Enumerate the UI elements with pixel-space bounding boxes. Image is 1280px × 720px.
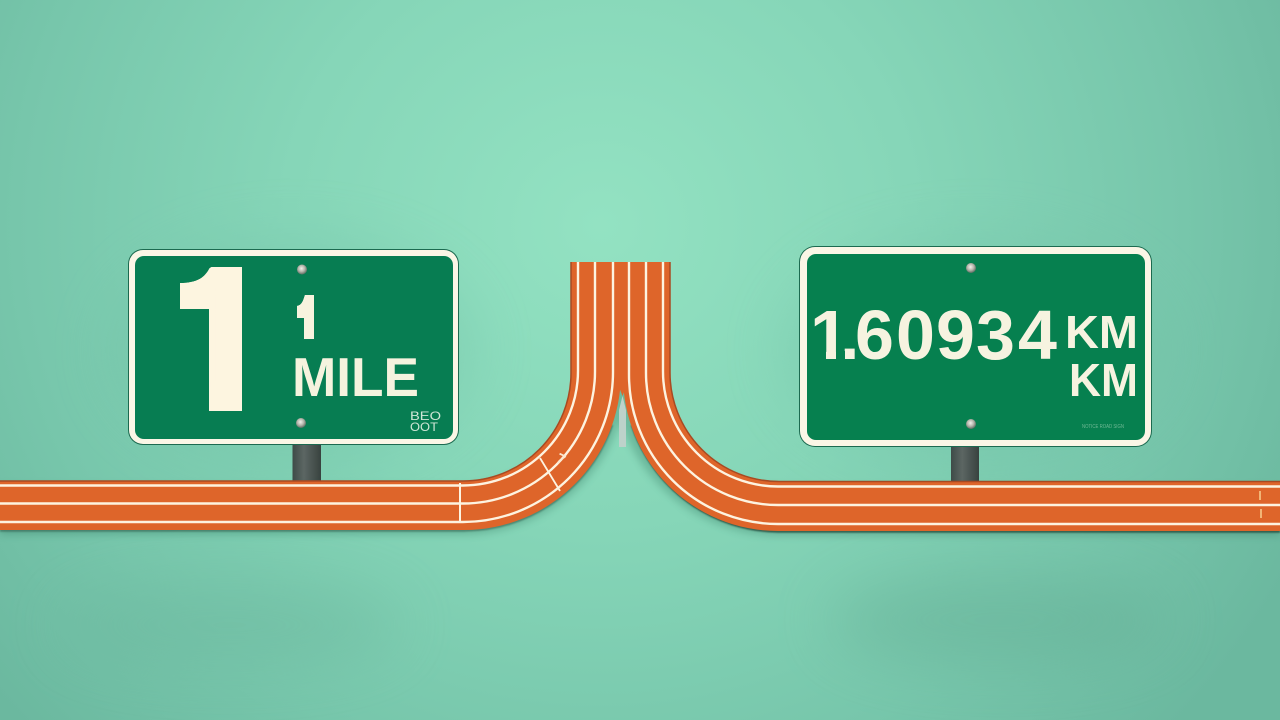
right lane surface xyxy=(623,262,1280,531)
dark edge: left track xyxy=(0,425,612,530)
fine print: OOT xyxy=(410,420,439,434)
value: 1.60934: 1.60934 xyxy=(810,296,1057,374)
lane marker xyxy=(540,458,560,491)
running track xyxy=(0,262,1280,532)
label: mile: MILE xyxy=(292,346,419,408)
rivet: bottom xyxy=(966,419,976,429)
left lane surface xyxy=(0,262,621,530)
start line xyxy=(459,483,461,522)
fine print: BEO xyxy=(410,409,441,423)
big numeral 1 xyxy=(180,267,242,411)
fine print: NOTICE ROAD SIGN xyxy=(1082,424,1124,430)
darker upper edges xyxy=(0,262,1280,482)
sign: kilometres xyxy=(799,246,1152,447)
small numeral 1 xyxy=(297,295,314,339)
small numeral 1: 1 xyxy=(290,281,326,353)
merged centre xyxy=(616,262,628,396)
post: right sign xyxy=(951,445,979,483)
rivet: top xyxy=(966,263,976,273)
track shadow xyxy=(0,274,1280,511)
rivet: bottom xyxy=(296,418,306,428)
unit: km: KM xyxy=(1065,306,1138,358)
sign: 1 mile xyxy=(128,249,459,445)
post: left sign xyxy=(292,444,321,482)
lane number: 7 xyxy=(553,450,568,469)
rivet: top xyxy=(297,264,307,274)
finish ticks xyxy=(1260,491,1261,518)
right lane lines xyxy=(629,262,1280,524)
left lane lines xyxy=(0,262,613,522)
big numeral 1: 1 xyxy=(164,224,280,456)
fine print xyxy=(410,409,441,434)
unit: km repeat: KM xyxy=(1069,354,1138,406)
dark edge: right track xyxy=(632,425,1280,532)
central grey post xyxy=(619,396,626,447)
